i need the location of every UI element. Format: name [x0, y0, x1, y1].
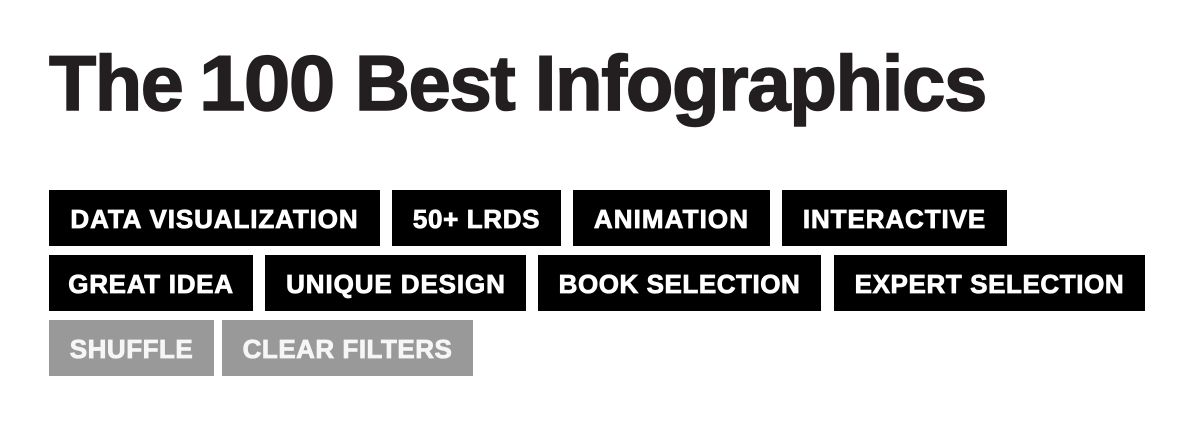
action button: clear filters: CLEAR FILTERS — [243, 334, 452, 364]
filter button: animation: ANIMATION — [594, 204, 749, 234]
title: Infographics — [535, 38, 986, 126]
filter button: animation — [573, 190, 770, 246]
filter button: unique design — [265, 255, 526, 311]
filter button: book selection: BOOK SELECTION — [559, 269, 800, 299]
title: Best — [355, 38, 514, 126]
filter button: 50+ LRDS — [392, 190, 561, 246]
filter button: data visualization — [49, 190, 380, 246]
filter button: 50+ LRDS: 50+ LRDS — [413, 204, 540, 234]
title: The — [49, 38, 182, 126]
filter button: interactive: INTERACTIVE — [803, 204, 986, 234]
title — [49, 38, 986, 128]
filter button: great idea: GREAT IDEA — [68, 269, 234, 299]
filter button: great idea — [49, 255, 253, 311]
filter button: data visualization: DATA VISUALIZATION — [70, 204, 359, 234]
filter button: expert selection — [834, 255, 1145, 311]
title: 100 — [199, 38, 334, 126]
filter button: unique design: UNIQUE DESIGN — [286, 269, 506, 299]
filter button: expert selection: EXPERT SELECTION — [855, 269, 1124, 299]
action button: clear filters — [222, 320, 473, 376]
filter button: interactive — [782, 190, 1007, 246]
filter button: book selection — [538, 255, 821, 311]
action button: shuffle: SHUFFLE — [70, 334, 193, 364]
action button: shuffle — [49, 320, 214, 376]
